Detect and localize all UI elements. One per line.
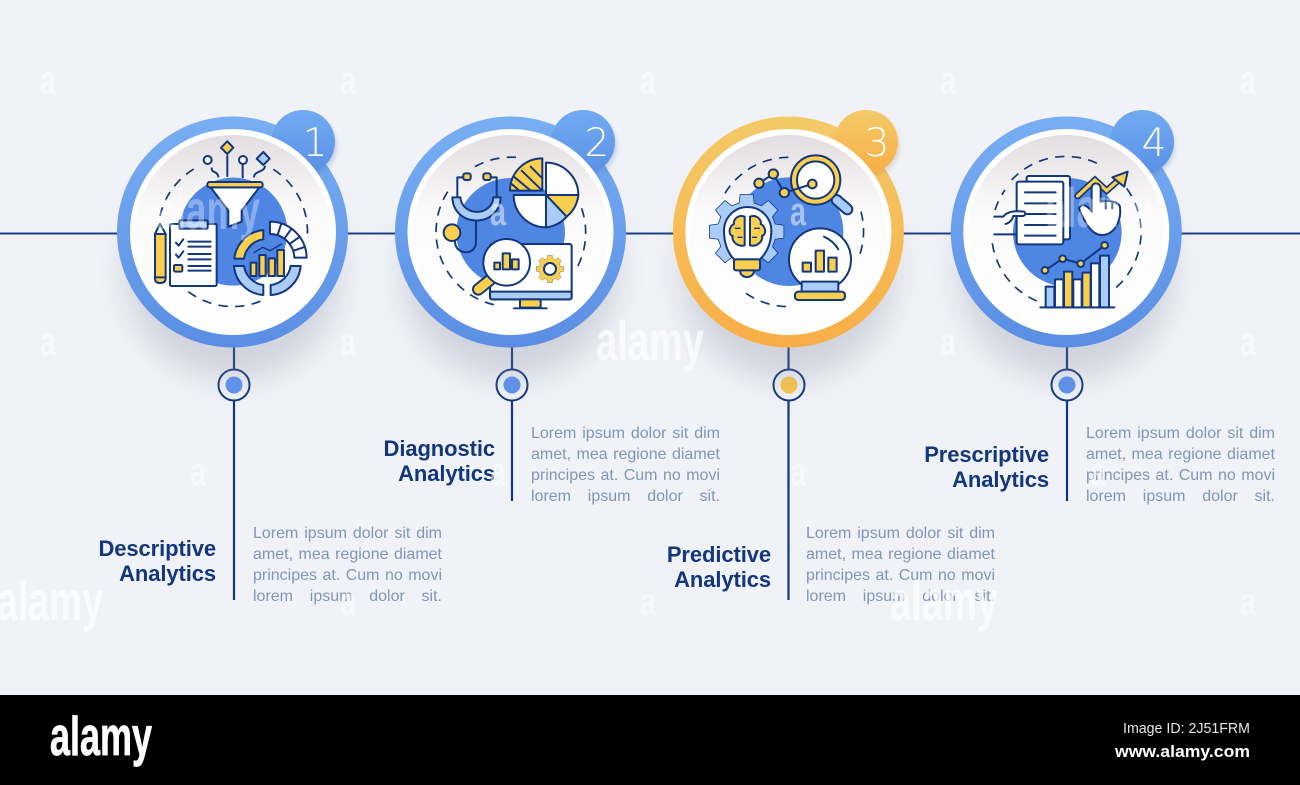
vertical connector and node 2: [496, 340, 528, 501]
watermark overlay: a: [790, 450, 807, 494]
text block: descriptive analytics: lorem ipsum dolor sit.: [253, 588, 442, 604]
text block: prescriptive analytics: lorem ipsum dolor sit.: [1086, 488, 1275, 504]
text block: prescriptive analytics: [1086, 424, 1275, 504]
website: www.alamy.com: [1114, 742, 1250, 761]
watermark overlay: a: [790, 190, 807, 234]
heading: diagnostic analytics: [384, 436, 495, 486]
text block: diagnostic analytics: [531, 424, 720, 504]
watermark overlay: alamy: [0, 569, 103, 632]
heading: prescriptive analytics: Prescriptive: [924, 442, 1049, 466]
heading: diagnostic analytics: Analytics: [398, 460, 495, 486]
text block: predictive analytics: principes at. Cum no movi: [806, 566, 995, 584]
watermark overlay: a: [1090, 450, 1107, 494]
watermark overlay: a: [1240, 59, 1257, 103]
vertical connector and node 4: [1052, 340, 1082, 501]
vertical connector and node 3: [774, 340, 804, 600]
icon: stethoscope, pie chart and monitor: [436, 157, 586, 308]
heading: predictive analytics: [667, 542, 771, 592]
text block: diagnostic analytics: Lorem ipsum dolor sit dim: [531, 424, 720, 442]
icon: funnel, clipboard and charts: [155, 141, 307, 307]
circle 3: predictive analytics: [673, 110, 904, 378]
badge 2: 2: [585, 121, 609, 166]
watermark overlay: a: [640, 580, 657, 624]
footer logo: alamy: [50, 705, 152, 767]
icon: brain bulb, magnifier and crystal ball: [709, 155, 864, 307]
watermark overlay: a: [190, 450, 207, 494]
watermark overlay: a: [1240, 320, 1257, 364]
heading: descriptive analytics: [98, 536, 216, 586]
text block: prescriptive analytics: principes at. Cum no movi: [1086, 466, 1275, 484]
circle 4: prescriptive analytics: [951, 110, 1182, 378]
heading: predictive analytics: Analytics: [674, 566, 771, 592]
watermark overlay: a: [340, 59, 357, 103]
text block: diagnostic analytics: principes at. Cum no movi: [531, 466, 720, 484]
text block: descriptive analytics: [253, 524, 442, 604]
circle 1: descriptive analytics: [117, 110, 348, 378]
vertical connector and node 1: [218, 340, 250, 600]
watermark overlay: alamy: [596, 309, 704, 372]
text block: descriptive analytics: amet, mea regione diamet: [253, 546, 442, 562]
footer bar: [0, 695, 1300, 785]
icon: document, hand and growth chart: [992, 156, 1141, 307]
watermark overlay: alamy: [890, 569, 998, 632]
text block: descriptive analytics: principes at. Cum no movi: [253, 566, 442, 584]
text block: predictive analytics: [806, 524, 995, 604]
image id: Image ID: 2J51FRM: [1123, 720, 1250, 737]
badge 1: [271, 110, 335, 174]
text block: prescriptive analytics: Lorem ipsum dolor sit dim: [1086, 424, 1275, 442]
heading: prescriptive analytics: [924, 442, 1049, 492]
watermark overlay: a: [40, 320, 57, 364]
text block: predictive analytics: amet, mea regione diamet: [806, 546, 995, 562]
badge 2: [551, 110, 615, 174]
badge 3: 3: [865, 121, 889, 166]
watermark overlay: a: [340, 580, 357, 624]
heading: predictive analytics: Predictive: [667, 542, 771, 566]
watermark overlay: alamy: [1045, 176, 1152, 239]
badge 1: 1: [303, 121, 327, 166]
text block: predictive analytics: lorem ipsum dolor sit.: [806, 588, 995, 604]
text block: diagnostic analytics: amet, mea regione diamet: [531, 446, 720, 462]
badge 4: [1110, 110, 1174, 174]
badge 4: 4: [1142, 121, 1166, 166]
text block: prescriptive analytics: amet, mea regione diamet: [1086, 446, 1275, 462]
watermark overlay: alamy: [155, 178, 260, 241]
heading: descriptive analytics: Descriptive: [98, 536, 216, 560]
watermark overlay: a: [640, 59, 657, 103]
text block: descriptive analytics: Lorem ipsum dolor sit dim: [253, 524, 442, 542]
badge 3: [834, 110, 898, 174]
watermark overlay: [0, 59, 1257, 632]
watermark overlay: a: [1240, 580, 1257, 624]
circle 2: diagnostic analytics: [395, 110, 626, 378]
text block: predictive analytics: Lorem ipsum dolor sit dim: [806, 524, 995, 542]
watermark overlay: a: [490, 190, 507, 234]
watermark overlay: a: [40, 59, 57, 103]
watermark overlay: a: [940, 320, 957, 364]
watermark overlay: a: [490, 450, 507, 494]
text block: diagnostic analytics: lorem ipsum dolor sit.: [531, 488, 720, 504]
watermark overlay: a: [940, 59, 957, 103]
watermark overlay: a: [340, 320, 357, 364]
heading: diagnostic analytics: Diagnostic: [384, 436, 495, 460]
horizontal timeline: [0, 232, 1300, 234]
heading: descriptive analytics: Analytics: [119, 560, 216, 586]
heading: prescriptive analytics: Analytics: [952, 466, 1049, 492]
